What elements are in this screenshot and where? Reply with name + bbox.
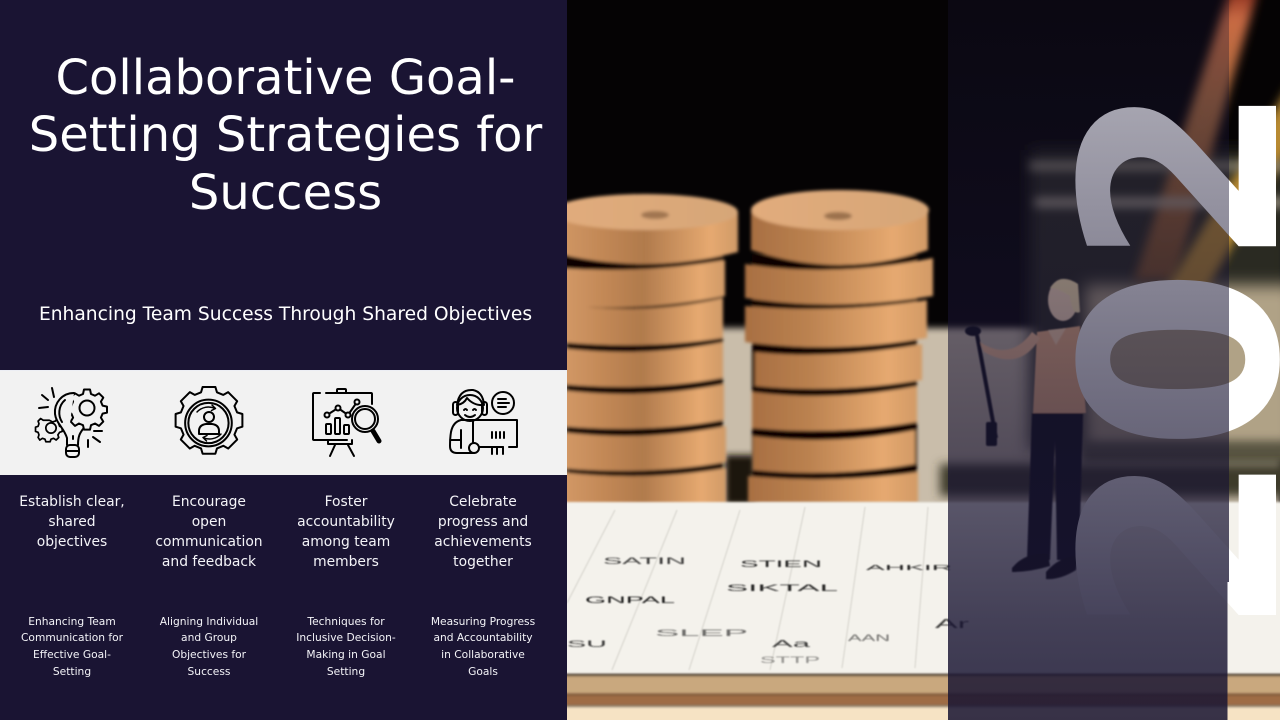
column 1 detail: Effective Goal- <box>33 648 111 661</box>
column 4 heading: achievements <box>434 534 532 550</box>
handwriting on the paper: SU <box>567 639 607 649</box>
handwriting on the paper: SLEP <box>655 628 748 638</box>
handwriting on the paper: Aa <box>772 639 811 650</box>
column 3 detail <box>296 614 396 678</box>
handwriting on the paper: SATIN <box>603 556 686 566</box>
column 2 heading: Encourage <box>172 494 246 510</box>
icon: presentation board with magnifier <box>312 388 382 457</box>
column 2 detail: Aligning Individual <box>160 614 258 628</box>
handwriting on the paper: STIEN <box>740 559 822 569</box>
column 2 detail: Success <box>188 665 230 678</box>
icon: gear with person <box>174 386 244 455</box>
handwriting on the paper: AAN <box>848 633 890 643</box>
handwriting on the paper: SIKTAL <box>726 583 838 593</box>
right coin stack <box>745 190 933 503</box>
column 3 heading <box>297 494 395 570</box>
column 4 detail: and Accountability <box>433 631 533 644</box>
column 4 detail: in Collaborative <box>441 648 525 661</box>
column 4 heading: Celebrate <box>449 494 517 510</box>
subtitle: Enhancing Team Success Through Shared Objectives <box>39 304 532 324</box>
title: Success <box>189 165 382 221</box>
column 2 heading: and feedback <box>162 554 256 570</box>
column 3 detail: Inclusive Decision- <box>296 631 396 644</box>
column 2 heading: open <box>192 514 226 530</box>
paper notebook <box>550 502 1280 720</box>
column 1 heading <box>19 494 125 550</box>
column 3 heading: among team <box>302 534 390 550</box>
column 3 heading: members <box>313 554 379 570</box>
column 1 detail: Setting <box>53 665 91 678</box>
translucent overlay panel <box>948 0 1229 720</box>
column 2 heading: communication <box>155 534 263 550</box>
title: Setting Strategies for <box>29 107 542 163</box>
miniature figure with microphone <box>965 279 1086 579</box>
column 4 heading: together <box>453 554 513 570</box>
column 3 heading: accountability <box>297 514 395 530</box>
column 2 heading <box>155 494 263 570</box>
left coin stack <box>551 194 738 505</box>
column 4 detail: Goals <box>468 665 498 678</box>
column 1 detail: Enhancing Team <box>28 614 116 628</box>
jar and pencils behind the figure <box>940 0 1280 496</box>
column 4 detail: Measuring Progress <box>431 614 535 628</box>
column 4 heading <box>434 494 532 570</box>
column 3 detail: Techniques for <box>307 614 385 628</box>
column 3 detail: Setting <box>327 665 365 678</box>
handwriting on the paper: GNPAL <box>585 595 675 605</box>
column 1 detail <box>21 614 123 678</box>
column 1 heading: Establish clear, <box>19 494 125 510</box>
handwriting on the paper: AHKIR <box>866 565 952 572</box>
icon: light bulb with gears <box>34 387 108 458</box>
column 2 detail: Objectives for <box>172 648 246 661</box>
left navy panel <box>0 0 567 720</box>
handwriting on the paper: STTP <box>760 655 820 665</box>
column 2 detail <box>160 614 258 678</box>
column 1 heading: objectives <box>37 534 107 550</box>
column 2 detail: and Group <box>181 631 237 644</box>
icon: person with headset at monitor <box>449 389 518 455</box>
column 4 heading: progress and <box>438 514 528 530</box>
column 3 heading: Foster <box>325 494 367 510</box>
column 1 detail: Communication for <box>21 631 123 644</box>
handwriting on the paper <box>567 556 971 665</box>
column 4 detail <box>431 614 535 678</box>
title <box>29 50 542 221</box>
column 3 detail: Making in Goal <box>306 648 386 661</box>
icon band <box>0 370 567 475</box>
photo backdrop <box>567 0 1280 720</box>
handwriting on the paper: Ar <box>935 616 971 631</box>
column 1 heading: shared <box>48 514 96 530</box>
title: Collaborative Goal- <box>56 50 515 106</box>
